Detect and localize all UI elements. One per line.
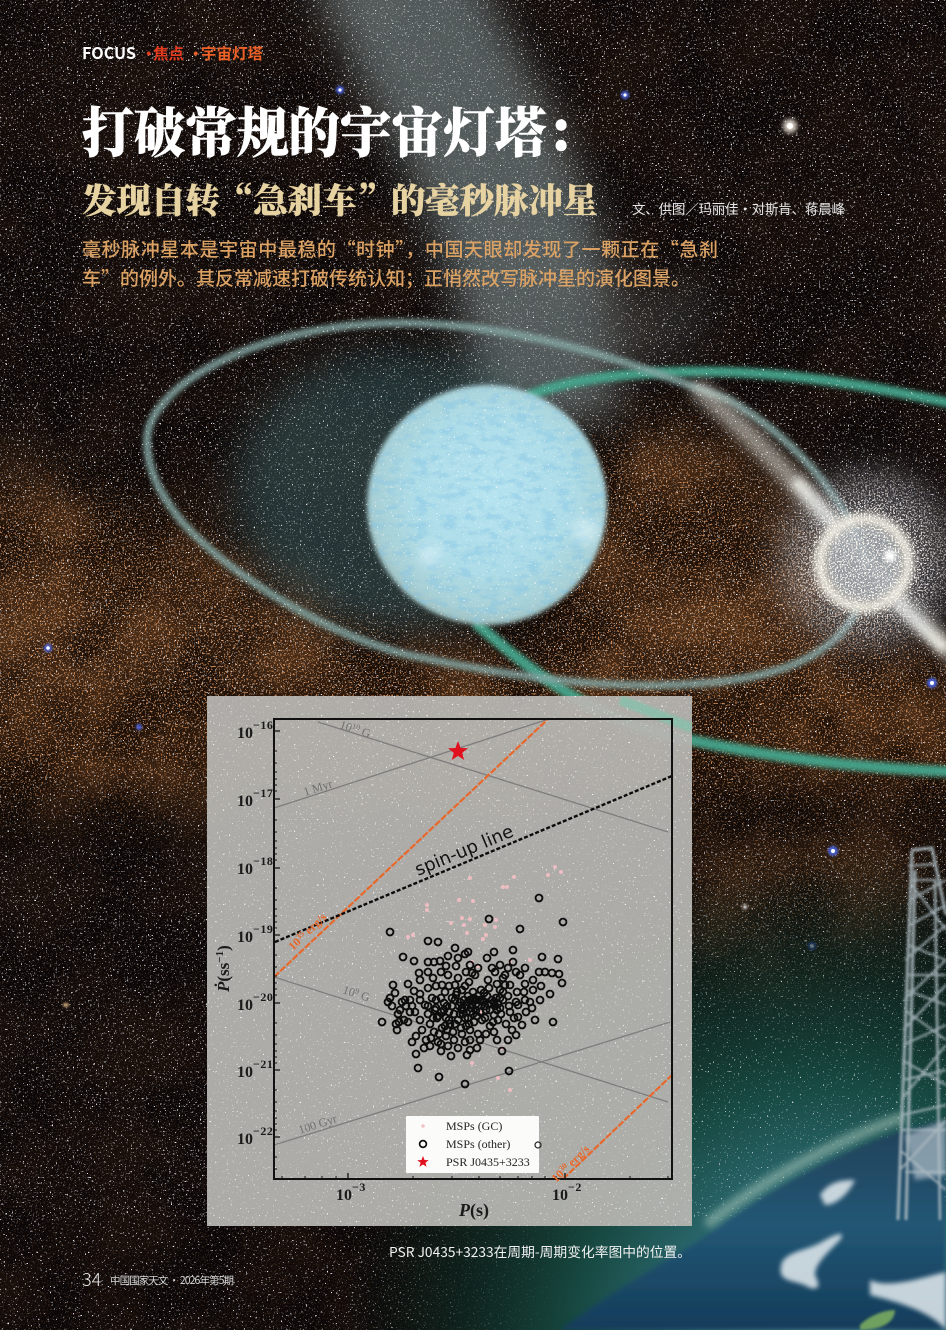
chart panel: P–Pdot diagram [207,696,692,1226]
pulsar with jets [700,390,946,670]
subtitle: 的 [391,173,426,223]
spin-up line label: spin-up line [412,821,517,881]
line labels: 100 Gyr [297,1111,339,1137]
intro paragraph: 车”的例外。其反常减速打破传统认知；正悄然改写脉冲星的演化图景。 [82,264,690,291]
orange energy-loss lines [274,720,672,1179]
x axis title: P(s) [458,1200,489,1221]
y axis tick labels: 10 [237,929,253,946]
intro paragraph: 毫秒脉冲星本是宇宙中最稳的“时钟”，中国天眼却发现了一颗正在“急刹 [82,235,718,262]
section tag: · [188,42,204,64]
x axis tick labels: 10 [336,1187,352,1204]
y axis tick labels: −17 [253,786,273,800]
y axis tick labels: −19 [253,922,273,936]
y axis tick labels: −22 [253,1124,273,1138]
x axis tick labels: −2 [568,1180,582,1194]
orange line labels: 10 [548,1167,567,1185]
line labels: G [357,724,373,741]
section tag [82,40,264,64]
orange line labels: 10 [285,935,304,953]
subtitle: “ [219,173,254,223]
grey light plume [300,0,710,420]
section tag: FOCUS [82,40,136,64]
legend: MSPs (GC) [446,1119,502,1133]
y axis title: −1 [214,951,226,963]
x axis tick labels [336,1180,582,1204]
x axis tick labels: 10 [552,1187,568,1204]
orange line labels [285,910,593,1185]
subtitle: 发现自转 [82,173,220,223]
y axis tick labels: 10 [237,1131,253,1148]
plot frame and ticks [274,719,672,1179]
y axis tick labels: 10 [237,1064,253,1081]
y axis tick labels: −18 [253,854,273,868]
y axis tick labels: 10 [237,861,253,878]
section tag: 焦点 [153,42,184,64]
line labels: 10 [341,983,357,1000]
sphere: white dwarf companion [360,380,610,630]
orange line labels: 30 [557,1161,569,1173]
orange line labels: 35 [294,929,306,941]
scatter: MSPs (GC) [408,867,561,1090]
line labels [297,718,373,1137]
elliptical orbit ring [147,323,866,685]
subtitle: ” [358,173,392,223]
intro paragraph [82,235,718,291]
line labels: 10 [338,718,354,735]
teal haze beside the sphere [235,350,565,630]
legend: PSR J0435+3233 [446,1155,530,1169]
byline: 文、供图／玛丽佳·对斯肯、蒋晨峰 [632,198,846,218]
magazine name: 中国国家天文 · 2026年第5期 [110,1273,234,1288]
y axis tick labels: 10 [237,997,253,1014]
subtitle: 毫秒脉冲星 [425,173,598,223]
subtitle: 急刹车 [253,173,356,223]
line labels: G [356,987,372,1005]
guide lines [274,718,670,1145]
foreground stars [0,0,946,1007]
line labels: 10 [351,721,361,732]
orange line labels: erg/s [300,910,330,939]
section tag: · [141,42,157,64]
y axis tick labels [237,718,273,1148]
line labels: 1 Myr [302,776,334,799]
y axis title: Ṗ(ss [214,963,233,992]
legend [406,1116,541,1173]
line labels: 9 [354,986,361,996]
y axis tick labels: −21 [253,1057,273,1071]
orbit band: green, behind sphere [478,372,946,772]
PSR J0435+3233 star [448,741,468,760]
earth and sky glow [0,770,946,1330]
scatter: MSPs (other) [382,898,563,1084]
main title: 打破常规的宇宙灯塔： [82,91,598,168]
section tag: 宇宙灯塔 [201,42,264,64]
panel background [207,696,692,1226]
y axis tick labels: −16 [253,718,273,732]
legend: MSPs (other) [446,1137,510,1151]
radio telescope tower [898,848,946,1220]
spin-up line [275,776,672,942]
y axis tick labels: 10 [237,793,253,810]
y axis title: ) [214,945,233,951]
orange line labels: erg/s [563,1142,593,1171]
y axis tick labels: −20 [253,990,273,1004]
x axis tick labels: −3 [352,1180,366,1194]
y axis tick labels: 10 [237,725,253,742]
chart caption: PSR J0435+3233在周期-周期变化率图中的位置。 [389,1241,691,1261]
page number: 34 [82,1266,102,1292]
